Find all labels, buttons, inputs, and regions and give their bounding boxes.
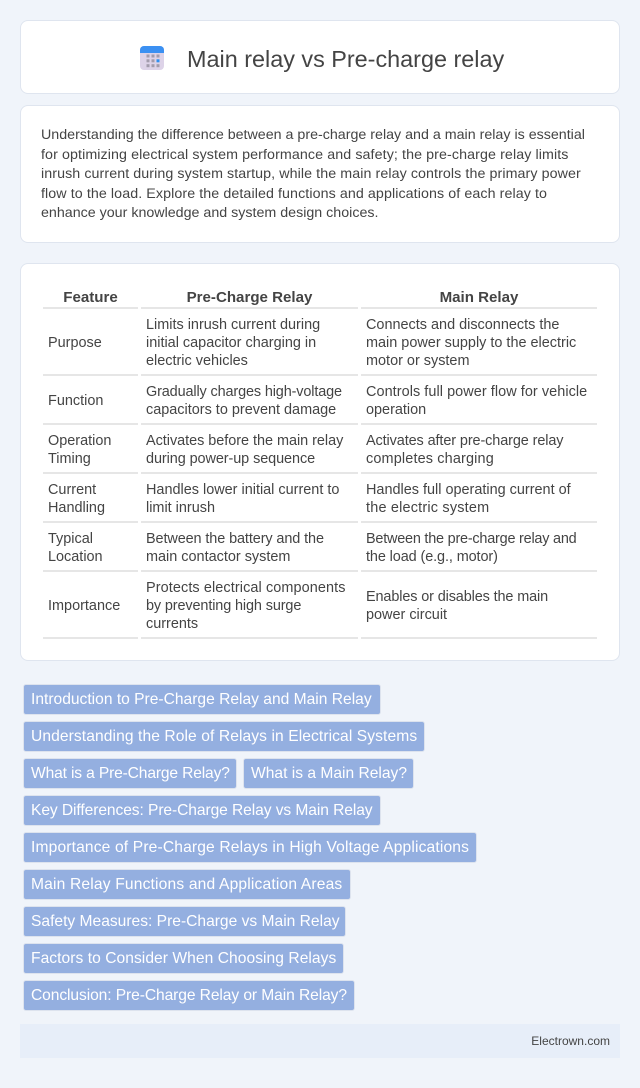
description text: enhance your knowledge and system design choices.: [41, 205, 378, 221]
row: Operation Timing: completes charging: [366, 451, 494, 467]
row: Operation Timing: Operation: [48, 433, 111, 449]
footer text: Electrown.com: [531, 1034, 610, 1048]
tag: what is a main relay: What is a Main Relay?: [251, 765, 407, 782]
row: Operation Timing: [48, 433, 564, 467]
row: Current Handling: limit inrush: [146, 500, 215, 516]
row: Current Handling: Handles full operating current of: [366, 482, 571, 498]
description text: flow to the load. Explore the detailed functions and applications of each relay to: [41, 186, 547, 202]
row: Function: operation: [366, 402, 426, 418]
icon: calendar: [140, 46, 164, 70]
tag: main relay functions: [23, 869, 351, 900]
row: Importance: Protects electrical components: [146, 580, 346, 596]
tag: introduction: [23, 684, 381, 715]
header card: [20, 20, 620, 94]
tag: key differences: Key Differences: Pre-Charge Relay vs Main Relay: [31, 802, 373, 819]
row: Function: Function: [48, 393, 103, 409]
row: Importance: currents: [146, 616, 198, 632]
row: Operation Timing: Timing: [48, 451, 91, 467]
tag: role of relays: Understanding the Role of Relays in Electrical Systems: [31, 728, 417, 745]
row: Operation Timing: Activates before the main relay: [146, 433, 343, 449]
tag: what is a main relay: [243, 758, 414, 789]
tag: what is a pre-charge relay: What is a Pre-Charge Relay?: [31, 765, 230, 782]
row: Function: capacitors to prevent damage: [146, 402, 336, 418]
row: Purpose: motor or system: [366, 353, 470, 369]
row: Purpose: electric vehicles: [146, 353, 248, 369]
row: Current Handling: [48, 482, 571, 516]
tag: introduction: Introduction to Pre-Charge Relay and Main Relay: [31, 691, 372, 708]
title: Main relay vs Pre-charge relay: [187, 46, 504, 72]
row: Current Handling: Handling: [48, 500, 105, 516]
table header: Main Relay: [361, 289, 597, 309]
row: Typical Location: main contactor system: [146, 549, 290, 565]
row: Current Handling: Handles lower initial current to: [146, 482, 339, 498]
tag: conclusion: Conclusion: Pre-Charge Relay or Main Relay?: [31, 987, 347, 1004]
row: Importance: by preventing high surge: [146, 598, 301, 614]
tag: factors to consider: [23, 943, 344, 974]
tag: what is a pre-charge relay: [23, 758, 237, 789]
row: Typical Location: Between the battery and the: [146, 531, 324, 547]
table header: Feature: [43, 289, 138, 309]
table header: Feature: Feature: [63, 289, 118, 306]
row: Purpose: Purpose: [48, 335, 102, 351]
row: Current Handling: the electric system: [366, 500, 489, 516]
tag: importance of pre-charge relays: [23, 832, 477, 863]
row: Importance: power circuit: [366, 607, 447, 623]
row: Typical Location: [48, 531, 576, 565]
row: Function: Gradually charges high-voltage: [146, 384, 342, 400]
table header: Pre-Charge Relay: [141, 289, 358, 309]
tag: main relay functions: Main Relay Functions and Application Areas: [31, 876, 342, 893]
tag: importance of pre-charge relays: Importance of Pre-Charge Relays in High Voltage Applications: [31, 839, 469, 856]
description text: [41, 127, 585, 221]
table header: Pre-Charge Relay: Pre-Charge Relay: [187, 289, 312, 306]
tag: safety measures: [23, 906, 346, 937]
row: Function: Controls full power flow for vehicle: [366, 384, 587, 400]
tag: factors to consider: Factors to Consider When Choosing Relays: [31, 950, 336, 967]
tag: role of relays: [23, 721, 425, 752]
description text: Understanding the difference between a pre-charge relay and a main relay is essential: [41, 127, 585, 143]
description text: for optimizing electrical system performance and safety; the pre-charge relay limits: [41, 146, 569, 162]
row: Function: [48, 384, 587, 418]
row: Typical Location: Typical: [48, 531, 93, 547]
row: Purpose: Connects and disconnects the: [366, 317, 559, 333]
description text: inrush current during system startup, while the main relay controls the primary power: [41, 166, 581, 182]
row: Typical Location: Between the pre-charge relay and: [366, 531, 576, 547]
row: Purpose: [48, 317, 576, 369]
row: Typical Location: Location: [48, 549, 103, 565]
row: Importance: Enables or disables the main: [366, 589, 548, 605]
footer: [20, 1024, 620, 1058]
row: Purpose: initial capacitor charging in: [146, 335, 316, 351]
panel: description: [20, 105, 620, 243]
row: Purpose: Limits inrush current during: [146, 317, 320, 333]
row: Current Handling: Current: [48, 482, 96, 498]
row: Importance: Importance: [48, 598, 120, 614]
row: Operation Timing: Activates after pre-charge relay: [366, 433, 563, 449]
row: Purpose: main power supply to the electric: [366, 335, 576, 351]
tag: safety measures: Safety Measures: Pre-Charge vs Main Relay: [31, 913, 340, 930]
row: Operation Timing: during power-up sequence: [146, 451, 315, 467]
panel: comparison table: [20, 263, 620, 661]
row: Importance: [48, 580, 548, 632]
table header: Main Relay: Main Relay: [440, 289, 518, 306]
tag: conclusion: [23, 980, 355, 1011]
row: Typical Location: the load (e.g., motor): [366, 549, 498, 565]
tag: key differences: [23, 795, 381, 826]
